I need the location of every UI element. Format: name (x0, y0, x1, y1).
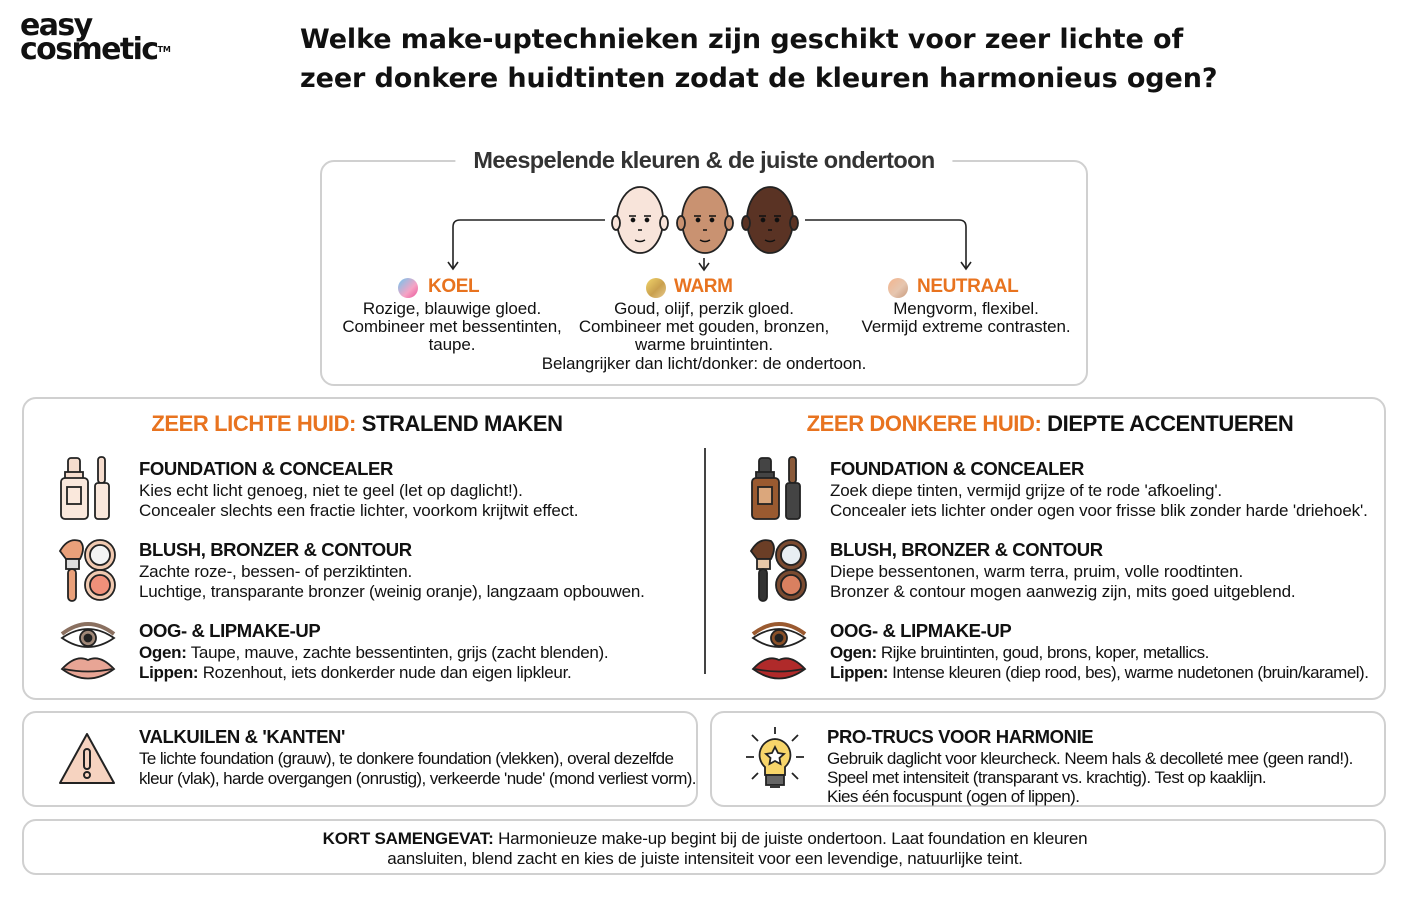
text: pro tips: Speel met intensiteit (transparant vs. krachtig). Test op kaaklijn. (827, 768, 1266, 787)
block: light foundation: FOUNDATION & CONCEALER (139, 458, 393, 479)
icon: warm swatch (646, 278, 666, 298)
column: koel: Combineer met bessentinten, (342, 317, 562, 336)
column: koel: taupe. (429, 335, 475, 354)
block: dark eyes lips: Lippen: Intense kleuren (diep rood, bes), warme nudetonen (bruin/karamel). (830, 662, 1368, 682)
block: dark blush: Diepe bessentonen, warm terra, pruim, volle roodtinten. (830, 562, 1243, 581)
column: neutraal: Mengvorm, flexibel. (893, 299, 1039, 318)
block: light foundation: Concealer slechts een fractie lichter, voorkom krijtwit effect. (139, 500, 578, 520)
block: dark foundation: Concealer iets lichter onder ogen voor frisse blik zonder harde 'driehoek'. (830, 500, 1368, 520)
block: dark blush: Bronzer & contour mogen aanwezig zijn, mits goed uitgeblend. (830, 582, 1296, 600)
panel: summary (22, 819, 1386, 875)
block: dark foundation: FOUNDATION & CONCEALER (830, 458, 1084, 479)
connector arrows (447, 219, 972, 272)
text: pitfalls: kleur (vlak), harde overgangen (onrustig), verkeerde 'nude' (mond verliest vorm). (139, 768, 696, 788)
column: koel (342, 276, 562, 354)
block: dark eyes lips: Ogen: Rijke bruintinten, goud, brons, koper, metallics. (830, 643, 1209, 662)
icon: dark eye and lips (752, 622, 806, 680)
icon: neutraal swatch (888, 278, 908, 298)
column: warm (579, 276, 829, 354)
block: light blush: Luchtige, transparante bronzer (weinig oranje), langzaam opbouwen. (139, 582, 645, 600)
panel heading: undertones: Meespelende kleuren & de juiste ondertoon (473, 147, 935, 173)
column: neutraal: NEUTRAAL (917, 276, 1018, 297)
block: dark blush: BLUSH, BRONZER & CONTOUR (830, 539, 1103, 560)
column: warm: Combineer met gouden, bronzen, (579, 317, 829, 336)
text: summary: KORT SAMENGEVAT: Harmonieuze make-up begint bij de juiste ondertoon. Laat foundation en kleuren (323, 829, 1087, 848)
text: pitfalls: Te lichte foundation (grauw), te donkere foundation (vlekken), overal dezelfde (139, 749, 673, 768)
block: dark eyes lips (830, 620, 1368, 682)
text: pro tips: Kies één focuspunt (ogen of lippen). (827, 787, 1079, 806)
column: koel: Rozige, blauwige gloed. (363, 299, 541, 318)
icon: three faces (611, 186, 799, 254)
icon: koel swatch (398, 278, 418, 298)
icon: dark foundation (751, 456, 801, 520)
column: neutraal (862, 276, 1070, 336)
block: dark foundation (830, 458, 1368, 520)
panel: pro tips (710, 711, 1386, 807)
icon: light foundation (60, 456, 110, 520)
block: light eyes lips: Ogen: Taupe, mauve, zachte bessentinten, grijs (zacht blenden). (139, 643, 608, 662)
text: summary: aansluiten, blend zacht en kies de juiste intensiteit voor een levendige, natuurlijke teint. (387, 848, 1023, 868)
text: pro tips: Gebruik daglicht voor kleurcheck. Neem hals & decolleté mee (geen rand!). (827, 749, 1353, 768)
block: light blush (139, 539, 645, 600)
text: undertone note: Belangrijker dan licht/donker: de ondertoon. (542, 354, 866, 373)
block: light foundation: Kies echt licht genoeg, niet te geel (let op daglicht!). (139, 481, 523, 500)
column: neutraal: Vermijd extreme contrasten. (862, 317, 1070, 336)
icon: warning (59, 733, 115, 784)
block: dark blush (830, 539, 1296, 600)
logo: cosmeticTM (20, 32, 171, 67)
column: warm: warme bruintinten. (635, 335, 773, 354)
title (300, 24, 1217, 94)
title: Welke make-uptechnieken zijn geschikt voor zeer lichte of (300, 24, 1183, 55)
logo (20, 8, 171, 67)
icon: light blush (59, 539, 116, 602)
block: light foundation (139, 458, 578, 520)
text: pro tips (827, 726, 1353, 806)
title: zeer donkere huidtinten zodat de kleuren harmonieus ogen? (300, 63, 1217, 94)
block: light eyes lips: OOG- & LIPMAKE-UP (139, 620, 320, 641)
column: warm: WARM (674, 276, 733, 297)
block: light blush: Zachte roze-, bessen- of perziktinten. (139, 562, 412, 581)
logo: easy (20, 8, 92, 43)
icon: lightbulb (746, 727, 804, 788)
block: light blush: BLUSH, BRONZER & CONTOUR (139, 539, 412, 560)
text: pro tips: PRO-TRUCS VOOR HARMONIE (827, 726, 1093, 747)
panel: main comparison (22, 397, 1386, 700)
text: pitfalls (139, 726, 696, 788)
column: koel: KOEL (428, 276, 479, 297)
block: light eyes lips (139, 620, 608, 682)
icon: dark blush (750, 539, 807, 602)
text: pitfalls: VALKUILEN & 'KANTEN' (139, 726, 345, 747)
icon: light eye and lips (60, 622, 116, 680)
text: summary (323, 829, 1087, 868)
heading: dark skin: ZEER DONKERE HUID: DIEPTE ACCENTUEREN (807, 411, 1293, 436)
panel: pitfalls (22, 711, 698, 807)
block: dark foundation: Zoek diepe tinten, vermijd grijze of te rode 'afkoeling'. (830, 481, 1222, 500)
panel: undertones (320, 160, 1088, 386)
column: warm: Goud, olijf, perzik gloed. (614, 299, 794, 318)
block: light eyes lips: Lippen: Rozenhout, iets donkerder nude dan eigen lipkleur. (139, 662, 571, 682)
heading: light skin: ZEER LICHTE HUID: STRALEND MAKEN (151, 411, 563, 436)
block: dark eyes lips: OOG- & LIPMAKE-UP (830, 620, 1011, 641)
